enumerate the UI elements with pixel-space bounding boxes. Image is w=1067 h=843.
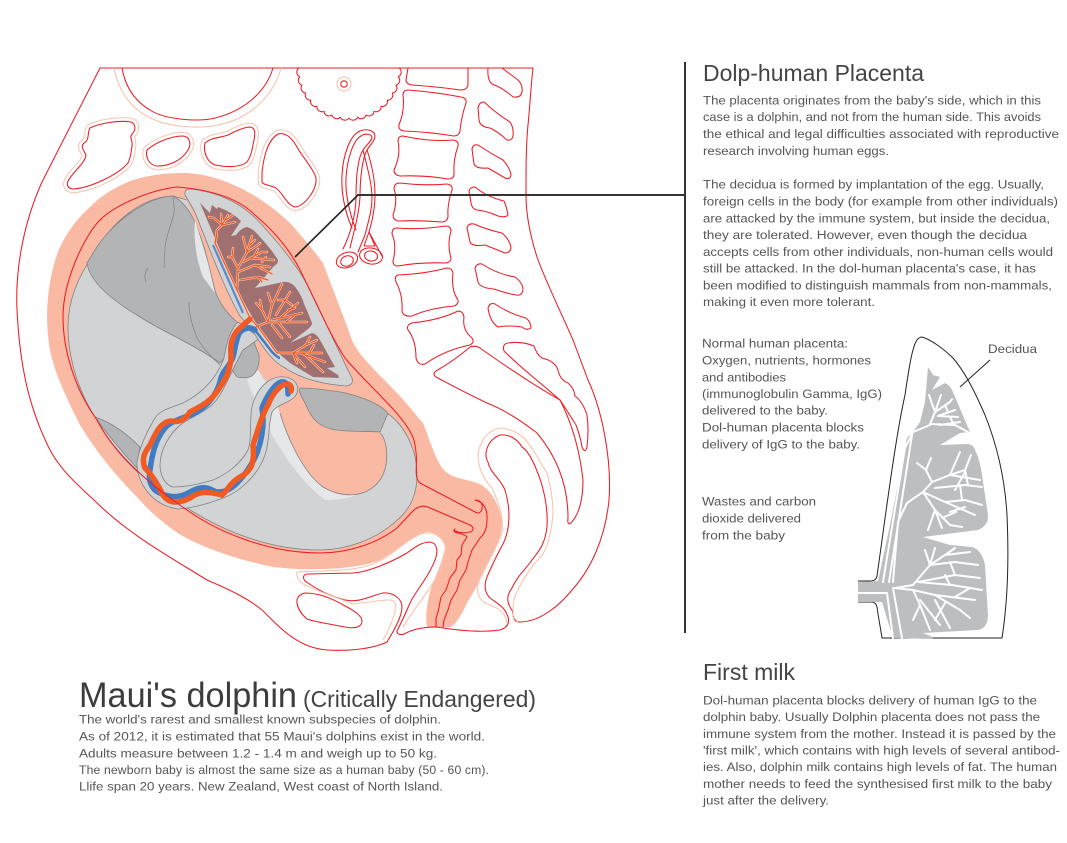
text block: decidua [703,178,1058,309]
title [79,676,536,715]
text block: normal human placenta: Dol-human placenta blocks [702,420,864,434]
text block: normal human placenta: delivered to the baby. [702,404,828,418]
text block: normal human placenta [702,336,882,452]
text block: first milk: immune system from the mother. Instead it is passed by the [703,727,1056,741]
peach line beneath uterus [297,533,446,627]
text block: normal human placenta: Normal human placenta: [702,336,848,350]
fetus body [87,196,388,468]
label: Decidua: Decidua [988,342,1037,356]
callout leader lines [295,62,685,633]
text block: decidua: still be attacked. In the dol-human placenta's case, it has [703,262,1036,276]
text block: decidua: they are tolerated. However, even though the decidua [703,228,1027,242]
text block: decidua: accepts cells from other individuals, non-human cells would [703,245,1053,259]
text block: wastes: Wastes and carbon [702,494,816,508]
amniotic fluid [183,192,387,495]
uterus pink wall [47,173,502,627]
anatomical cross-section illustration [17,68,610,650]
grey amniotic cavity [68,196,417,550]
text block: wastes: from the baby [702,528,786,542]
text block: species facts [79,712,489,794]
text block: first milk: mother needs to feed the synthesised first milk to the baby [703,777,1053,791]
text block: normal human placenta: and antibodies [702,370,786,384]
text block: decidua: foreign cells in the body (for example from other individuals) [703,194,1058,208]
text block: decidua: making it even more tolerant. [703,295,875,309]
placenta vessels [209,214,325,372]
text block: species facts: The newborn baby is almost the same size as a human baby (50 - 60 cm). [79,763,489,777]
umbilical cord vessels [143,319,291,502]
placenta lobes [200,203,339,378]
title: Maui's dolphin [79,676,297,715]
text block: normal human placenta: Oxygen, nutrients, hormones [702,354,871,368]
uterus red outline [63,187,487,627]
text block: species facts: The world's rarest and smallest known subspecies of dolphin. [79,712,441,726]
text block: first milk: dolphin baby. Usually Dolphin placenta does not pass the [703,710,1040,724]
text block: first milk: 'first milk', which contains with high levels of several antibod- [703,744,1060,758]
heading: Dolp-human Placenta: Dolp-human Placenta [703,60,924,86]
spine vertebrae [392,68,588,623]
text block: placenta origin [703,94,1059,158]
text block: placenta origin: research involving human eggs. [703,144,889,158]
text block: decidua: been modified to distinguish mammals from non-mammals, [703,278,1052,292]
text block: species facts: As of 2012, it is estimated that 55 Maui's dolphins exist in the world. [79,730,485,744]
text block: first milk [702,694,1060,808]
digestive organs [67,68,401,207]
text block: decidua: are attacked by the immune system, but inside the decidua, [703,212,1050,226]
text block: placenta origin: The placenta originates from the baby's side, which in this [703,94,1041,108]
text block: normal human placenta: delivery of IgG to the baby. [702,438,860,452]
diagram vessels [858,395,982,638]
body outline [17,68,610,650]
diagram outline [858,337,1008,638]
text block: species facts: Llife span 20 years. New Zealand, West coast of North Island. [79,780,443,794]
tube structure [334,130,384,271]
diagram grey lobes [858,367,988,639]
placenta diagram [858,337,1037,639]
text block: first milk: ies. Also, dolphin milk contains high levels of fat. The human [703,760,1057,774]
label: Decidua [960,342,1037,387]
text block: first milk: Dol-human placenta blocks delivery of human IgG to the [703,694,1037,708]
text block: decidua: The decidua is formed by implantation of the egg. Usually, [703,178,1044,192]
pale band [247,370,360,500]
umbilical cord envelope [137,322,298,509]
text block: placenta origin: the ethical and legal difficulties associated with reproductive [703,127,1059,141]
text block: species facts: Adults measure between 1.2 - 1.4 m and weigh up to 50 kg. [79,746,437,760]
text block: first milk: just after the delivery. [702,794,829,808]
text block: wastes [702,494,816,542]
placenta [185,189,352,386]
title: (Critically Endangered) [303,686,536,712]
heading: First milk: First milk [703,659,795,685]
text block: wastes: dioxide delivered [702,512,801,526]
text block: normal human placenta: (immunoglobulin Gamma, IgG) [702,387,882,401]
text block: placenta origin: case is a dolphin, and not from the human side. This avoids [703,110,1041,124]
